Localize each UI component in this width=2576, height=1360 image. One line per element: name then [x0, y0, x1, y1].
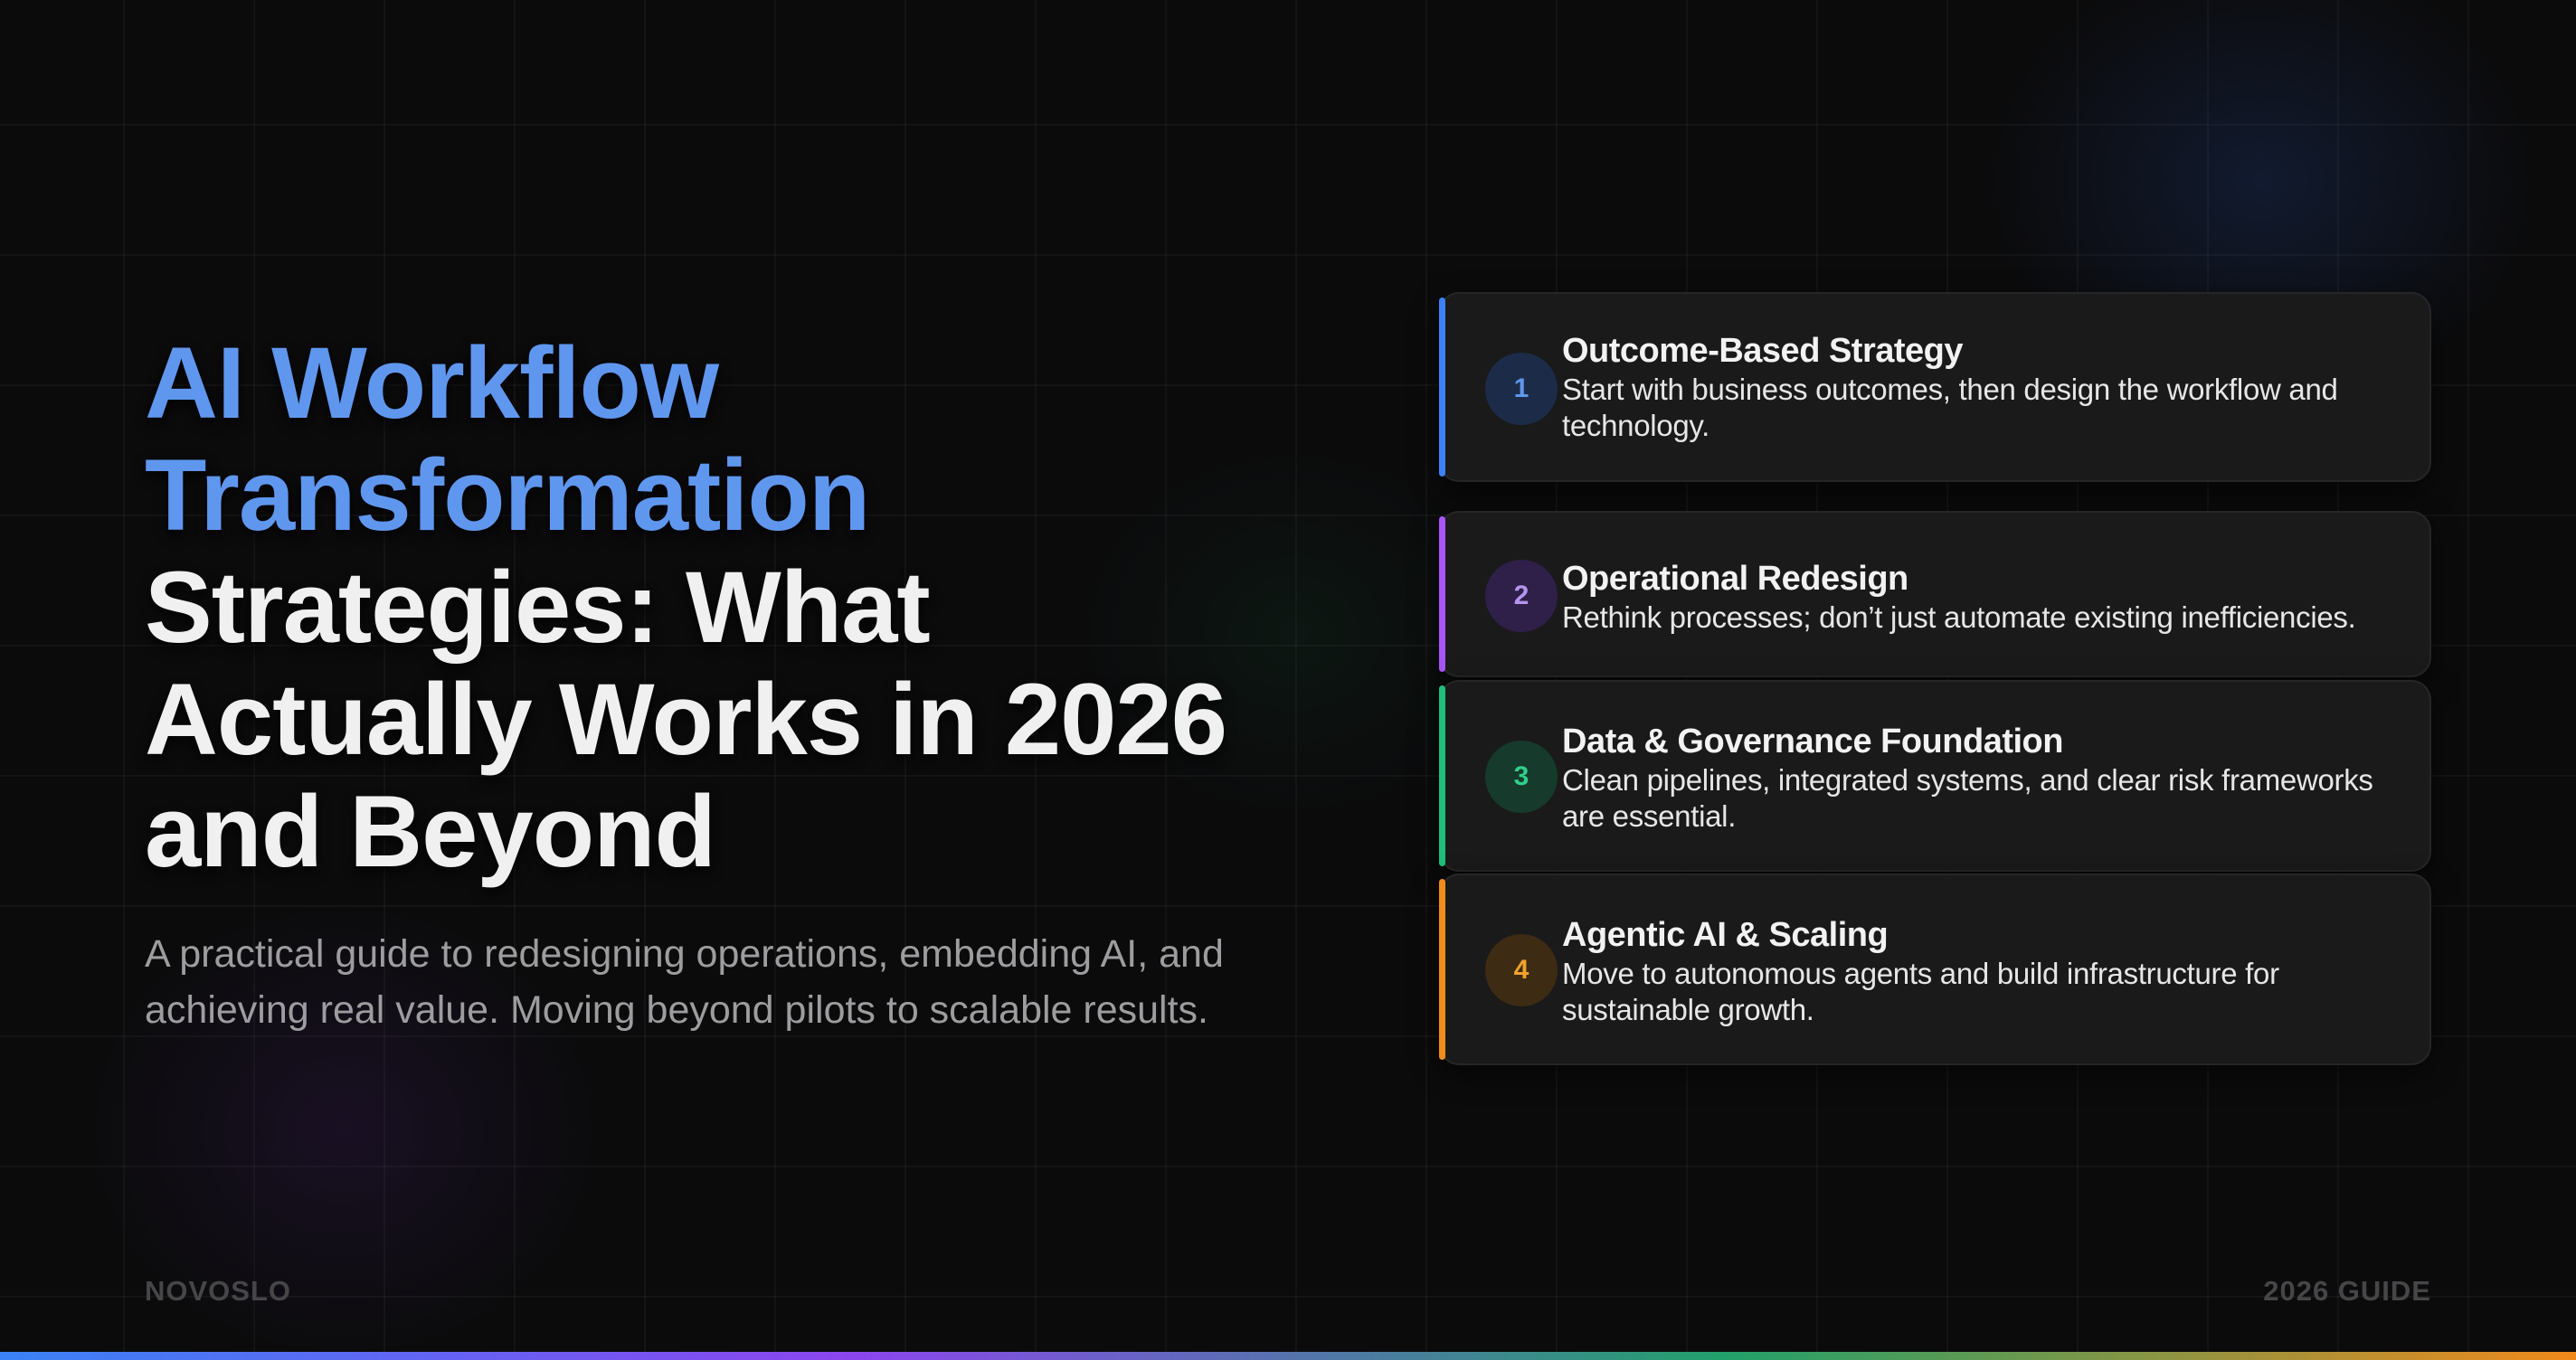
text: card 4: sustainable growth.	[1562, 993, 1814, 1026]
text: card 2: Operational Redesign	[1562, 560, 1908, 598]
text: card 3: Clean pipelines, integrated systems, and clear risk frameworks	[1562, 763, 2373, 797]
title: Transformation	[145, 439, 869, 552]
icon: number 3: 3	[1514, 761, 1529, 791]
title: Strategies: What	[145, 551, 930, 664]
title: and Beyond	[145, 775, 715, 888]
text: card 3: Data & Governance Foundation	[1562, 722, 2063, 760]
text: card 1: Outcome-Based Strategy	[1562, 332, 1963, 370]
card 1: Outcome-Based Strategy	[1439, 292, 2431, 482]
text: card 1: technology.	[1562, 409, 1709, 442]
footer: brand: NOVOSLO	[145, 1275, 291, 1307]
icon: number 2: 2	[1514, 581, 1529, 610]
text: card 3	[1562, 722, 2373, 833]
subtitle: A practical guide to redesigning operations, embedding AI, and achieving real value. Moving beyond pilots to scalable results.	[145, 932, 1224, 1032]
text: card 4: Move to autonomous agents and build infrastructure for	[1562, 957, 2279, 990]
icon: number 4	[1485, 934, 1558, 1006]
icon: number 4: 4	[1514, 955, 1529, 985]
card 3: Data & Governance Foundation	[1439, 680, 2431, 872]
title: Actually Works in 2026	[145, 663, 1226, 776]
text: card 1: Start with business outcomes, then design the workflow and	[1562, 373, 2338, 406]
title: AI Workflow	[145, 326, 718, 439]
icon: number 1: 1	[1514, 373, 1529, 403]
text: card 4: Agentic AI & Scaling	[1562, 916, 1888, 954]
text: card 1	[1562, 332, 2338, 442]
card 2: Operational Redesign	[1439, 511, 2431, 677]
card 4: Agentic AI & Scaling	[1439, 874, 2431, 1065]
text: card 3: are essential.	[1562, 799, 1736, 833]
icon: number 2	[1485, 560, 1558, 632]
title	[145, 326, 1226, 888]
text: card 4	[1562, 916, 2279, 1026]
text: card 2: Rethink processes; don’t just automate existing inefficiencies.	[1562, 600, 2355, 634]
icon: number 3	[1485, 741, 1558, 813]
footer: guide label: 2026 GUIDE	[2263, 1275, 2431, 1307]
text: card 2	[1562, 560, 2355, 634]
icon: number 1	[1485, 353, 1558, 425]
